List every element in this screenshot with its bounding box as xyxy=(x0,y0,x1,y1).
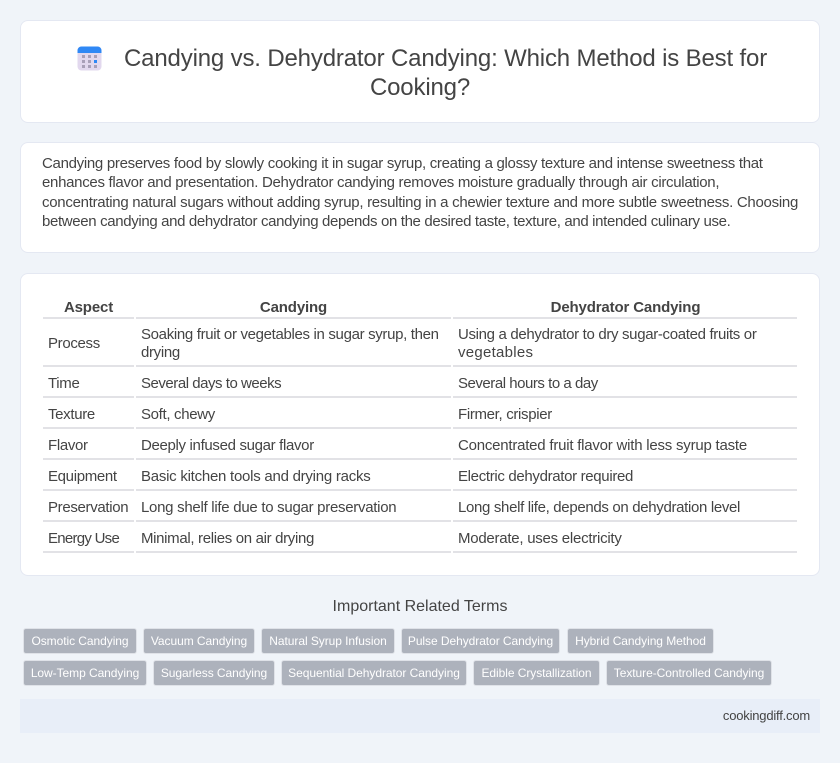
chip xyxy=(281,660,467,686)
chip: Sequential Dehydrator Candying xyxy=(288,666,460,680)
row: Energy Use: Energy Use xyxy=(48,530,119,547)
text block: description xyxy=(42,155,798,230)
chip: Low-Temp Candying xyxy=(31,666,139,680)
row: Flavor: Flavor xyxy=(48,437,88,454)
row: Flavor xyxy=(48,437,747,454)
row: Texture: Soft, chewy xyxy=(141,406,215,423)
row: Preservation: Long shelf life, depends on dehydration level xyxy=(458,499,740,516)
row: Equipment xyxy=(48,468,633,485)
row: Preservation: Long shelf life due to sugar preservation xyxy=(141,499,396,516)
row: Process: Using a dehydrator to dry sugar-coated fruits or xyxy=(458,326,756,343)
chip xyxy=(401,628,560,654)
row: Time: Several days to weeks xyxy=(141,375,281,392)
row: Process: Process xyxy=(48,335,100,352)
row: Texture: Firmer, crispier xyxy=(458,406,552,423)
chip: Sugarless Candying xyxy=(161,666,267,680)
term chips xyxy=(23,628,772,686)
row: Energy Use: Moderate, uses electricity xyxy=(458,530,622,547)
text: between candying and dehydrator candying depends on the desired taste, texture, and intended culinary use. xyxy=(42,213,730,230)
chip xyxy=(23,660,147,686)
title: Candying vs. Dehydrator Candying: Which Method is Best for xyxy=(124,45,767,72)
panel: comparison table xyxy=(20,273,820,576)
row: Texture xyxy=(48,406,552,423)
row: Process: Soaking fruit or vegetables in sugar syrup, then xyxy=(141,326,439,343)
header: Aspect: Aspect xyxy=(64,299,113,316)
title xyxy=(124,45,767,101)
row: Equipment: Electric dehydrator required xyxy=(458,468,633,485)
footer: source: cookingdiff.com xyxy=(723,708,810,723)
chip xyxy=(473,660,600,686)
text: concentrating natural sugars without adding syrup, resulting in a chewier texture and more subtle sweetness. Choosing xyxy=(42,194,798,211)
header: Candying: Candying xyxy=(260,299,327,316)
text: Candying preserves food by slowly cooking it in sugar syrup, creating a glossy texture and intense sweetness that xyxy=(42,155,763,172)
row: Texture: Texture xyxy=(48,406,95,423)
row: Equipment: Basic kitchen tools and drying racks xyxy=(141,468,370,485)
row: Process: vegetables xyxy=(458,344,533,361)
header: Dehydrator Candying: Dehydrator Candying xyxy=(551,299,700,316)
row: Time xyxy=(48,375,598,392)
row: Flavor: Concentrated fruit flavor with less syrup taste xyxy=(458,437,747,454)
comparison table xyxy=(43,299,797,553)
row: Preservation xyxy=(48,499,740,516)
text: enhances flavor and presentation. Dehydrator candying removes moisture gradually through air circulation, xyxy=(42,174,719,191)
chip: Texture-Controlled Candying xyxy=(614,666,764,680)
chip: Osmotic Candying xyxy=(31,634,129,648)
row: Energy Use: Minimal, relies on air drying xyxy=(141,530,314,547)
row: Process xyxy=(48,326,757,361)
row: Process: drying xyxy=(141,344,180,361)
panel: title header xyxy=(20,20,820,123)
chip xyxy=(261,628,395,654)
chip: Natural Syrup Infusion xyxy=(269,634,387,648)
row: Time: Several hours to a day xyxy=(458,375,598,392)
icon: calendar xyxy=(78,46,102,70)
row: Energy Use xyxy=(48,530,622,547)
title: Cooking? xyxy=(370,74,470,101)
row: Time: Time xyxy=(48,375,79,392)
row: Flavor: Deeply infused sugar flavor xyxy=(141,437,314,454)
row: Preservation: Preservation xyxy=(48,499,128,516)
heading: Important Related Terms: Important Related Terms xyxy=(333,598,507,615)
chip xyxy=(23,628,137,654)
row: Equipment: Equipment xyxy=(48,468,117,485)
chip: Hybrid Candying Method xyxy=(575,634,706,648)
chip xyxy=(567,628,714,654)
chip xyxy=(606,660,772,686)
chip: Edible Crystallization xyxy=(481,666,592,680)
chip: Vacuum Candying xyxy=(151,634,247,648)
footer bar xyxy=(20,699,820,733)
chip: Pulse Dehydrator Candying xyxy=(408,634,553,648)
panel: description xyxy=(20,142,820,253)
chip xyxy=(153,660,275,686)
chip xyxy=(143,628,255,654)
